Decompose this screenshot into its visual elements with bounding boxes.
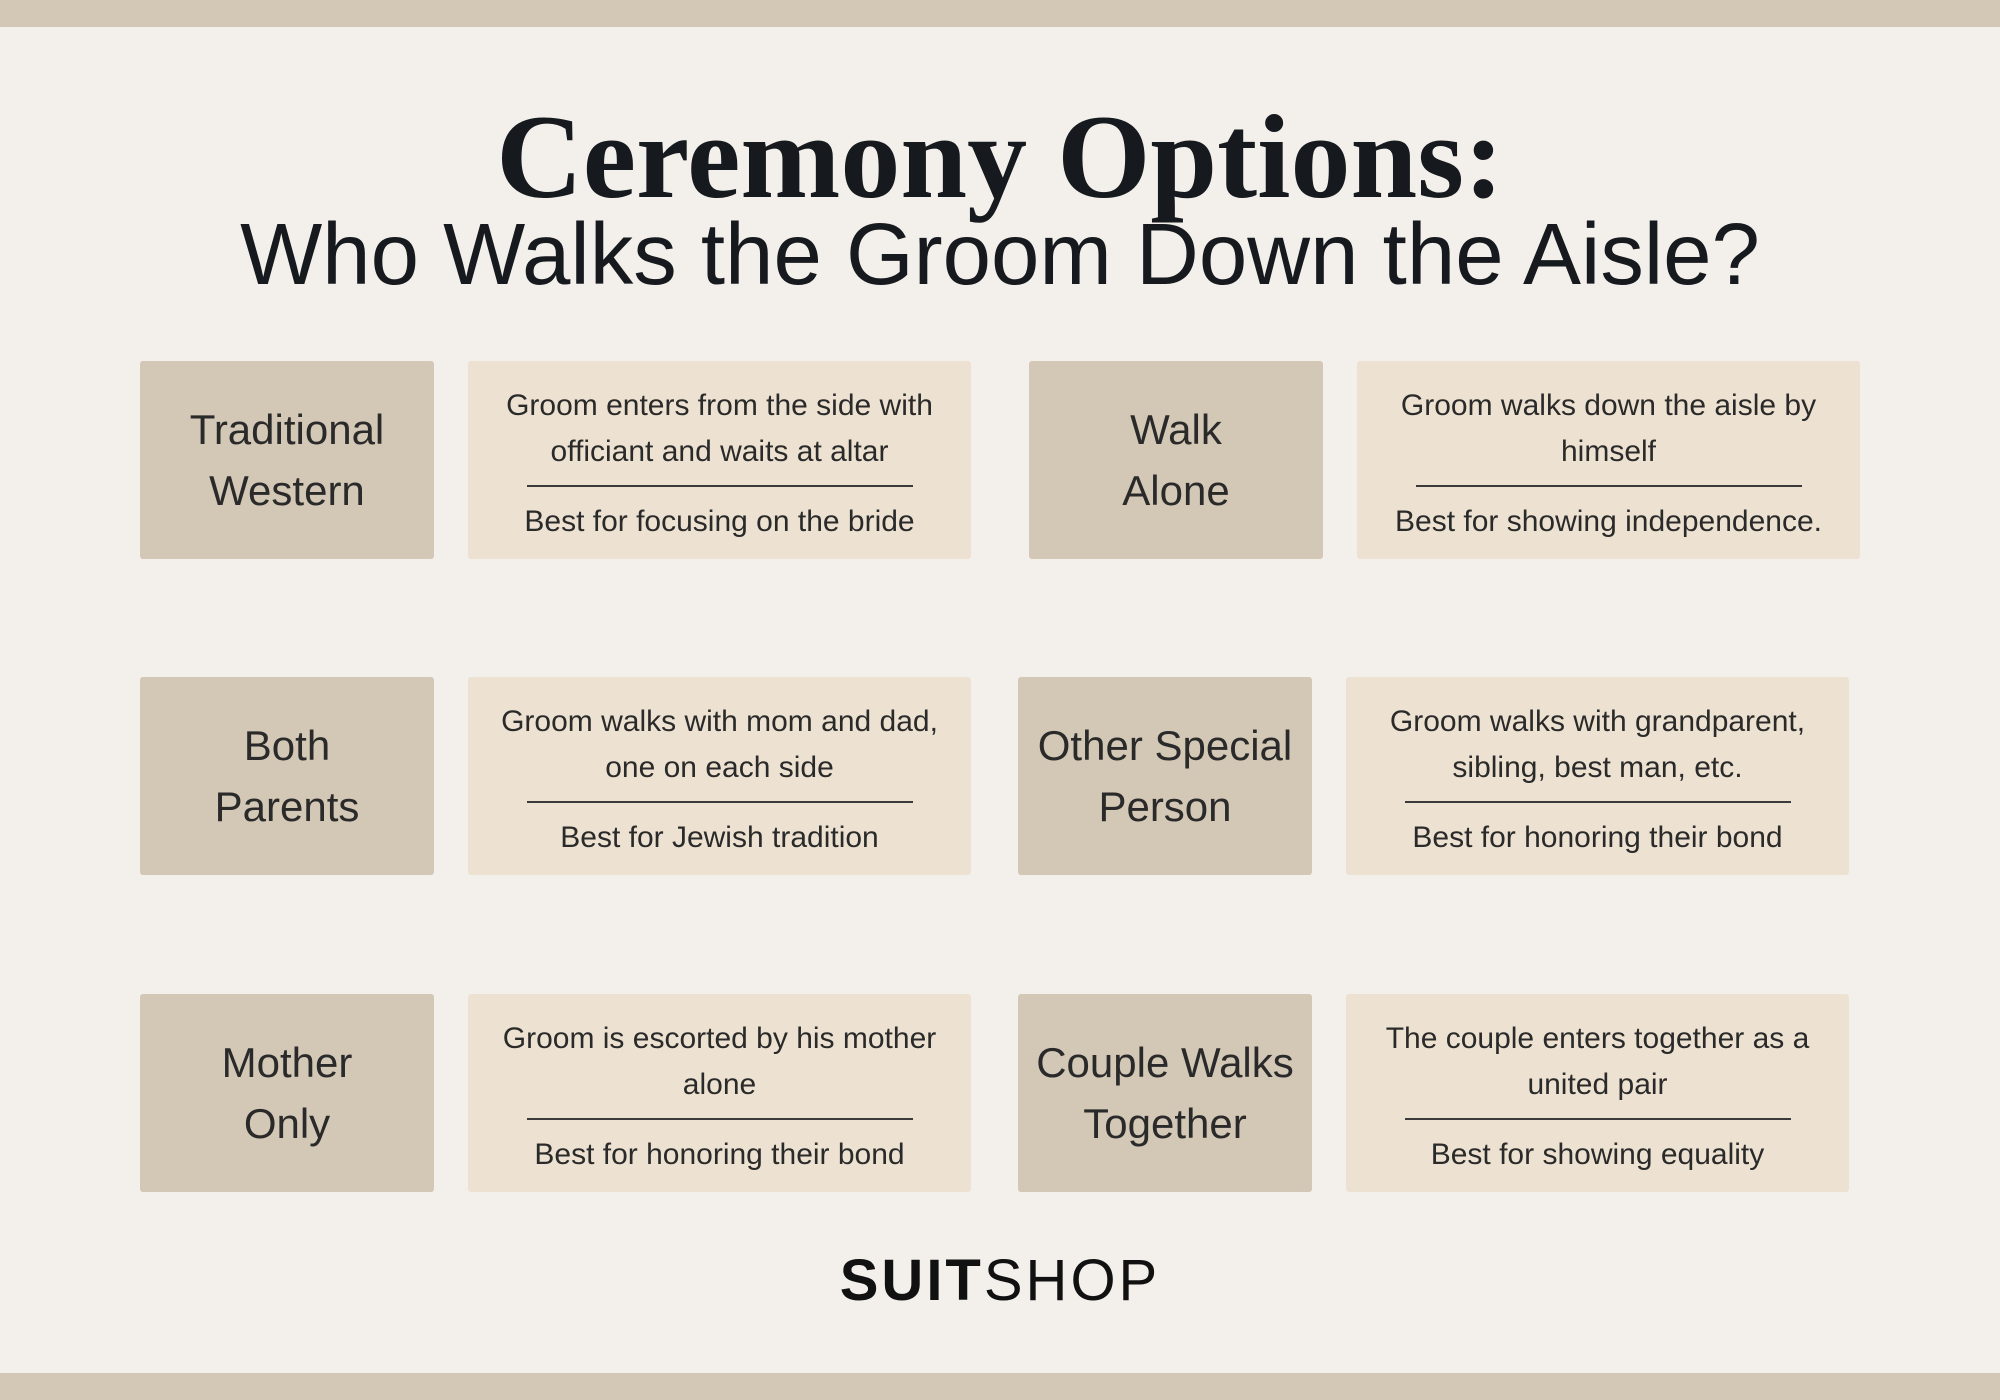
desc: Traditional Western [468,361,971,559]
desc: Traditional Western: Groom enters from the side with officiant and waits at altar [506,389,933,468]
label: Walk Alone: Alone [1122,467,1230,514]
desc: Couple Walks Together [1346,994,1849,1192]
label: Other Special Person: Person [1098,783,1232,830]
desc: Both Parents: Groom walks with mom and dad, one on each side [501,705,938,784]
desc: Both Parents [468,677,971,875]
desc: Walk Alone: Groom walks down the aisle by himself [1401,389,1816,468]
desc: Other Special Person [1346,677,1849,875]
label: Both Parents [140,677,434,875]
label: Walk Alone [1029,361,1323,559]
label: Mother Only: Mother [222,1039,352,1086]
label: Traditional Western: Traditional [190,406,384,453]
desc: Couple Walks Together: The couple enters together as a united pair [1386,1022,1809,1101]
label: Mother Only: Only [244,1100,330,1147]
label: Both Parents: Both [244,722,330,769]
label: Couple Walks Together [1018,994,1312,1192]
label: Traditional Western: Western [209,467,365,514]
desc: Mother Only [468,994,971,1192]
label: Other Special Person: Other Special [1038,722,1292,769]
label: Traditional Western [140,361,434,559]
title: Ceremony Options: [496,90,1504,223]
label: Walk Alone: Walk [1130,406,1222,453]
label: Other Special Person [1018,677,1312,875]
desc: Both Parents: Best for Jewish tradition [560,821,879,854]
desc: Other Special Person: Groom walks with grandparent, sibling, best man, etc. [1390,705,1805,784]
label: Couple Walks Together: Together [1083,1100,1247,1147]
label: Both Parents: Parents [215,783,359,830]
desc: Couple Walks Together: Best for showing equality [1431,1138,1764,1171]
desc: Walk Alone [1357,361,1860,559]
desc: Mother Only: Groom is escorted by his mother alone [503,1022,936,1101]
desc: Walk Alone: Best for showing independence. [1395,505,1822,538]
logo: SUITSHOP [840,1248,1160,1313]
label: Mother Only [140,994,434,1192]
desc: Other Special Person: Best for honoring their bond [1412,821,1783,854]
desc: Traditional Western: Best for focusing on the bride [524,505,915,538]
subtitle: Who Walks the Groom Down the Aisle? [240,206,1760,303]
desc: Mother Only: Best for honoring their bond [534,1138,905,1171]
label: Couple Walks Together: Couple Walks [1036,1039,1294,1086]
